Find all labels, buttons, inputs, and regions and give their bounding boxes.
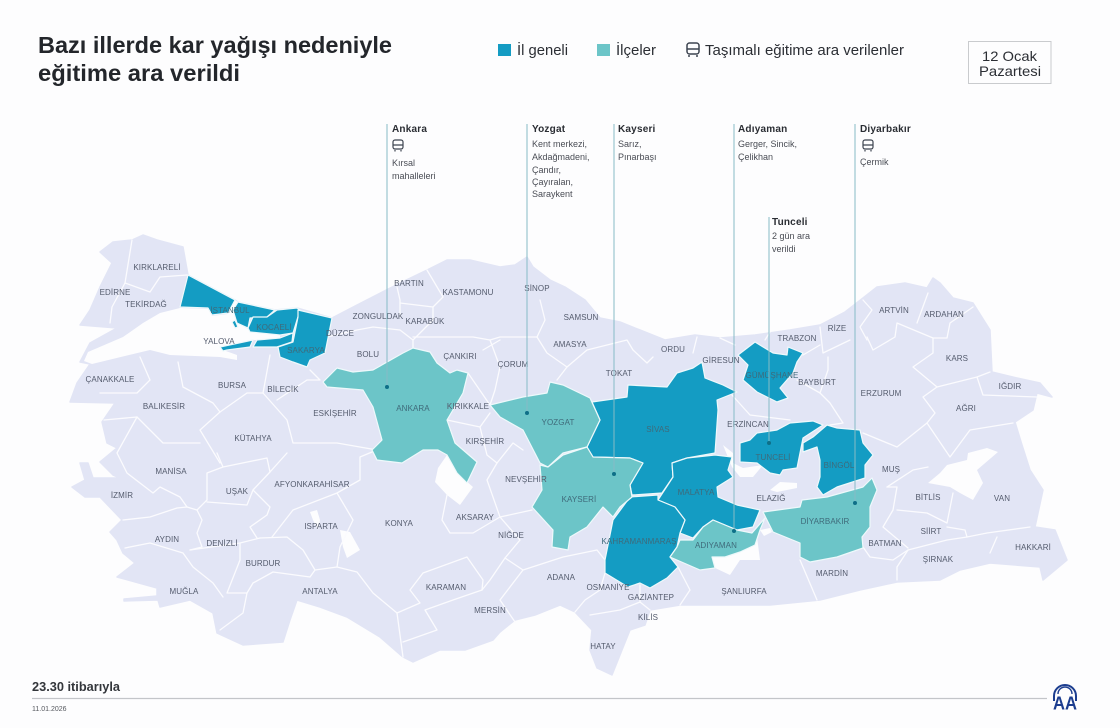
callout: Tunceli: 2 gün ara xyxy=(772,231,810,241)
province labels: ADIYAMAN xyxy=(695,541,737,550)
provinces: İl geneli xyxy=(180,275,873,588)
province labels: KAYSERİ xyxy=(562,495,596,504)
province labels: AMASYA xyxy=(553,340,587,349)
province labels: KIRIKKALE xyxy=(447,402,489,411)
province labels: AFYONKARAHİSAR xyxy=(274,480,350,489)
province: Tunceli xyxy=(740,421,823,475)
province labels: IĞDIR xyxy=(999,382,1021,391)
callout: Tunceli xyxy=(767,217,810,445)
callout: Yozgat: Akdağmadeni, xyxy=(532,152,590,162)
province labels: HAKKARİ xyxy=(1015,543,1051,552)
title xyxy=(38,32,392,86)
province labels: DENİZLİ xyxy=(206,539,238,548)
province labels: BALIKESİR xyxy=(143,402,185,411)
callout: Yozgat: Çayıralan, xyxy=(532,177,573,187)
legend: İl geneli: İl geneli xyxy=(517,41,568,59)
province labels: ERZİNCAN xyxy=(727,420,769,429)
province labels: MERSİN xyxy=(474,606,506,615)
province labels: BURSA xyxy=(218,381,247,390)
callout: Diyarbakır: Diyarbakır xyxy=(860,124,911,135)
province: Kayseri xyxy=(532,447,643,550)
province labels: KİLİS xyxy=(638,613,658,622)
map of Turkey xyxy=(70,235,1067,675)
province labels: TUNCELİ xyxy=(756,453,790,462)
callout: Yozgat xyxy=(525,124,590,415)
province labels: BİTLİS xyxy=(915,493,941,502)
province labels: ERZURUM xyxy=(861,389,902,398)
province labels: GAZİANTEP xyxy=(628,593,674,602)
province: Ankara xyxy=(323,348,477,483)
province labels: BOLU xyxy=(357,350,379,359)
province labels: ŞANLIURFA xyxy=(721,587,767,596)
province: Kahramanmaraş xyxy=(605,495,685,588)
province labels: TOKAT xyxy=(606,369,632,378)
date box xyxy=(968,42,1051,84)
province labels: SİİRT xyxy=(921,527,941,536)
legend: İl geneli xyxy=(498,41,568,59)
callout: Adıyaman: Adıyaman xyxy=(738,124,787,135)
province labels: SİVAS xyxy=(646,425,670,434)
callout: Kayseri: Sarız, xyxy=(618,139,642,149)
callout: Kayseri: Pınarbaşı xyxy=(618,152,657,162)
province labels: KARABÜK xyxy=(406,317,445,326)
callout: Yozgat: Yozgat xyxy=(532,124,566,135)
title: Bazı illerde kar yağışı nedeniyle xyxy=(38,32,392,58)
province: Malatya xyxy=(658,455,760,538)
legend: İlçeler: İlçeler xyxy=(616,41,656,59)
province labels: AKSARAY xyxy=(456,513,495,522)
province labels: ANTALYA xyxy=(302,587,338,596)
province labels: YALOVA xyxy=(203,337,235,346)
date box: Pazartesi xyxy=(979,63,1041,79)
date box: 12 Ocak xyxy=(982,48,1038,64)
province labels: EDİRNE xyxy=(100,288,130,297)
province labels: RİZE xyxy=(828,324,846,333)
land base xyxy=(70,235,1067,675)
province labels: ELAZIĞ xyxy=(756,494,786,503)
province labels: MANİSA xyxy=(155,467,187,476)
province labels: OSMANİYE xyxy=(586,583,630,592)
province labels: VAN xyxy=(994,494,1010,503)
province labels: ZONGULDAK xyxy=(353,312,404,321)
logo: AA xyxy=(1053,685,1077,714)
callout: Yozgat: Saraykent xyxy=(532,189,573,199)
water: Marmara Sea xyxy=(84,300,280,364)
province labels: DİYARBAKIR xyxy=(801,517,850,526)
province labels: KASTAMONU xyxy=(443,288,494,297)
province: Kocaeli xyxy=(248,308,300,347)
province labels: KÜTAHYA xyxy=(234,434,272,443)
province labels: BATMAN xyxy=(868,539,902,548)
province labels: SAMSUN xyxy=(564,313,599,322)
province labels: KAHRAMANMARAŞ xyxy=(601,537,677,546)
province labels: AĞRI xyxy=(956,404,976,413)
province: Adıyaman xyxy=(670,518,765,570)
province labels: KONYA xyxy=(385,519,414,528)
legend: İlçeler xyxy=(597,41,656,59)
callout: Ankara: mahalleleri xyxy=(392,171,436,181)
province labels: KARS xyxy=(946,354,968,363)
province labels: YOZGAT xyxy=(542,418,574,427)
callout: Adıyaman: Gerger, Sincik, xyxy=(738,139,797,149)
province labels: ADANA xyxy=(547,573,576,582)
callout: Diyarbakır xyxy=(853,124,911,505)
province labels: TEKİRDAĞ xyxy=(125,300,167,309)
province labels: KARAMAN xyxy=(426,583,466,592)
province labels: İZMİR xyxy=(111,491,133,500)
callout: Ankara: Kırsal xyxy=(392,158,415,168)
province labels: SİNOP xyxy=(524,284,550,293)
province labels: ARTVİN xyxy=(879,306,909,315)
province labels xyxy=(86,263,1051,651)
provinces: İlçeler xyxy=(323,348,877,570)
province labels: GİRESUN xyxy=(702,356,740,365)
province labels: AYDIN xyxy=(155,535,179,544)
province boundaries xyxy=(100,240,1037,657)
footer xyxy=(32,680,1047,713)
callout: Yozgat: Çandır, xyxy=(532,165,561,175)
title: eğitime ara verildi xyxy=(38,60,240,86)
province labels: MARDİN xyxy=(816,569,848,578)
province labels: ÇORUM xyxy=(498,360,529,369)
water: lakes xyxy=(310,445,998,575)
province labels: HATAY xyxy=(590,642,616,651)
province labels: ISPARTA xyxy=(304,522,338,531)
province labels: BİNGÖL xyxy=(824,461,855,470)
province: İstanbul xyxy=(180,275,275,328)
province: Diyarbakır xyxy=(763,478,877,562)
province labels: ŞIRNAK xyxy=(923,555,954,564)
province: Sakarya xyxy=(278,310,332,367)
callout: Yozgat: Kent merkezi, xyxy=(532,139,587,149)
legend: bus: Taşımalı eğitime ara verilenler xyxy=(705,42,904,59)
callout: Adıyaman xyxy=(732,124,797,533)
province: Gümüşhane xyxy=(738,342,803,402)
province: Sivas xyxy=(587,362,737,495)
province labels: MUŞ xyxy=(882,465,900,474)
callout: Adıyaman: Çelikhan xyxy=(738,152,773,162)
province: Yalova xyxy=(220,340,253,351)
province labels: NİĞDE xyxy=(498,531,524,540)
callout: Kayseri xyxy=(612,124,657,476)
callout: Diyarbakır: Çermik xyxy=(860,157,889,167)
footer: 11.01.2026 xyxy=(32,706,67,713)
logo: AA: AA xyxy=(1053,694,1077,714)
province labels: KOCAELİ xyxy=(256,323,292,332)
province labels: GÜMÜŞHANE xyxy=(746,371,798,380)
province labels: ÇANAKKALE xyxy=(86,375,134,384)
footer: 23.30 itibarıyla xyxy=(32,680,121,694)
province labels: BAYBURT xyxy=(798,378,836,387)
province labels: NEVŞEHİR xyxy=(505,475,547,484)
callout: Ankara: Ankara xyxy=(392,124,427,135)
province labels: ARDAHAN xyxy=(924,310,964,319)
province labels: İSTANBUL xyxy=(210,306,250,315)
province labels: ANKARA xyxy=(396,404,430,413)
callout: Ankara xyxy=(385,124,436,389)
callout: Kayseri: Kayseri xyxy=(618,124,656,135)
province labels: UŞAK xyxy=(226,487,249,496)
callout: Tunceli: verildi xyxy=(772,244,796,254)
province labels: KIRKLARELİ xyxy=(133,263,181,272)
province labels: ORDU xyxy=(661,345,685,354)
province labels: MALATYA xyxy=(678,488,715,497)
province labels: DÜZCE xyxy=(326,329,354,338)
callout: Tunceli: Tunceli xyxy=(772,217,808,228)
province labels: SAKARYA xyxy=(287,346,325,355)
province labels: BARTIN xyxy=(394,279,424,288)
province labels: BİLECİK xyxy=(267,385,299,394)
province labels: ESKİŞEHİR xyxy=(313,409,357,418)
province labels: TRABZON xyxy=(778,334,817,343)
province labels: KIRŞEHİR xyxy=(466,437,504,446)
province labels: ÇANKIRI xyxy=(443,352,477,361)
province labels: MUĞLA xyxy=(170,587,199,596)
province: Bingöl xyxy=(803,425,873,495)
province labels: BURDUR xyxy=(246,559,281,568)
legend xyxy=(498,41,904,59)
province: Yozgat xyxy=(490,382,600,467)
